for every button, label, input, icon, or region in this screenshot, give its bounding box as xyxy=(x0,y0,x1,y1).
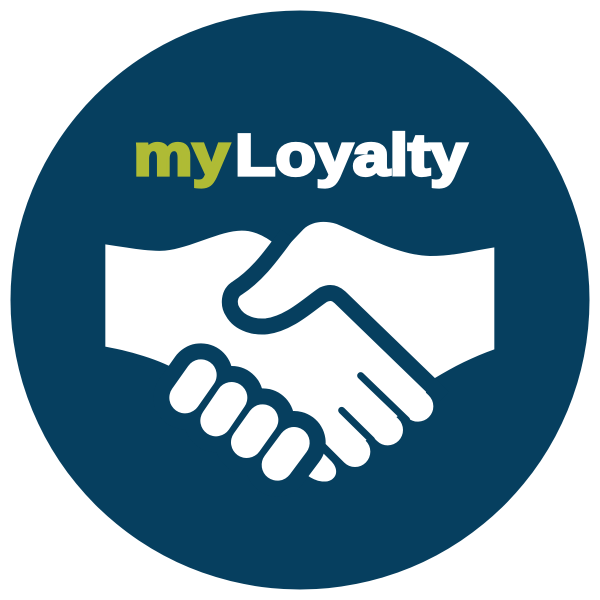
left hand finger 2 xyxy=(216,398,232,421)
left hand finger 4 xyxy=(277,443,294,465)
hands silhouette xyxy=(105,222,494,450)
right hand pinky finger xyxy=(308,450,336,482)
knuckle outline xyxy=(185,375,294,465)
right hand ring finger xyxy=(307,403,355,452)
title: myLoyalty xyxy=(134,123,467,188)
icon: handshake xyxy=(105,222,494,482)
title: myLoyalty: Loyalty xyxy=(235,123,467,188)
slits between fingers xyxy=(342,376,407,440)
band between hands xyxy=(230,234,443,397)
title: myLoyalty: my xyxy=(134,123,230,188)
left hand finger 3 xyxy=(247,420,263,442)
left hand finger 1 xyxy=(185,375,201,398)
right hand index finger xyxy=(357,347,418,406)
right hand middle finger xyxy=(330,373,388,430)
